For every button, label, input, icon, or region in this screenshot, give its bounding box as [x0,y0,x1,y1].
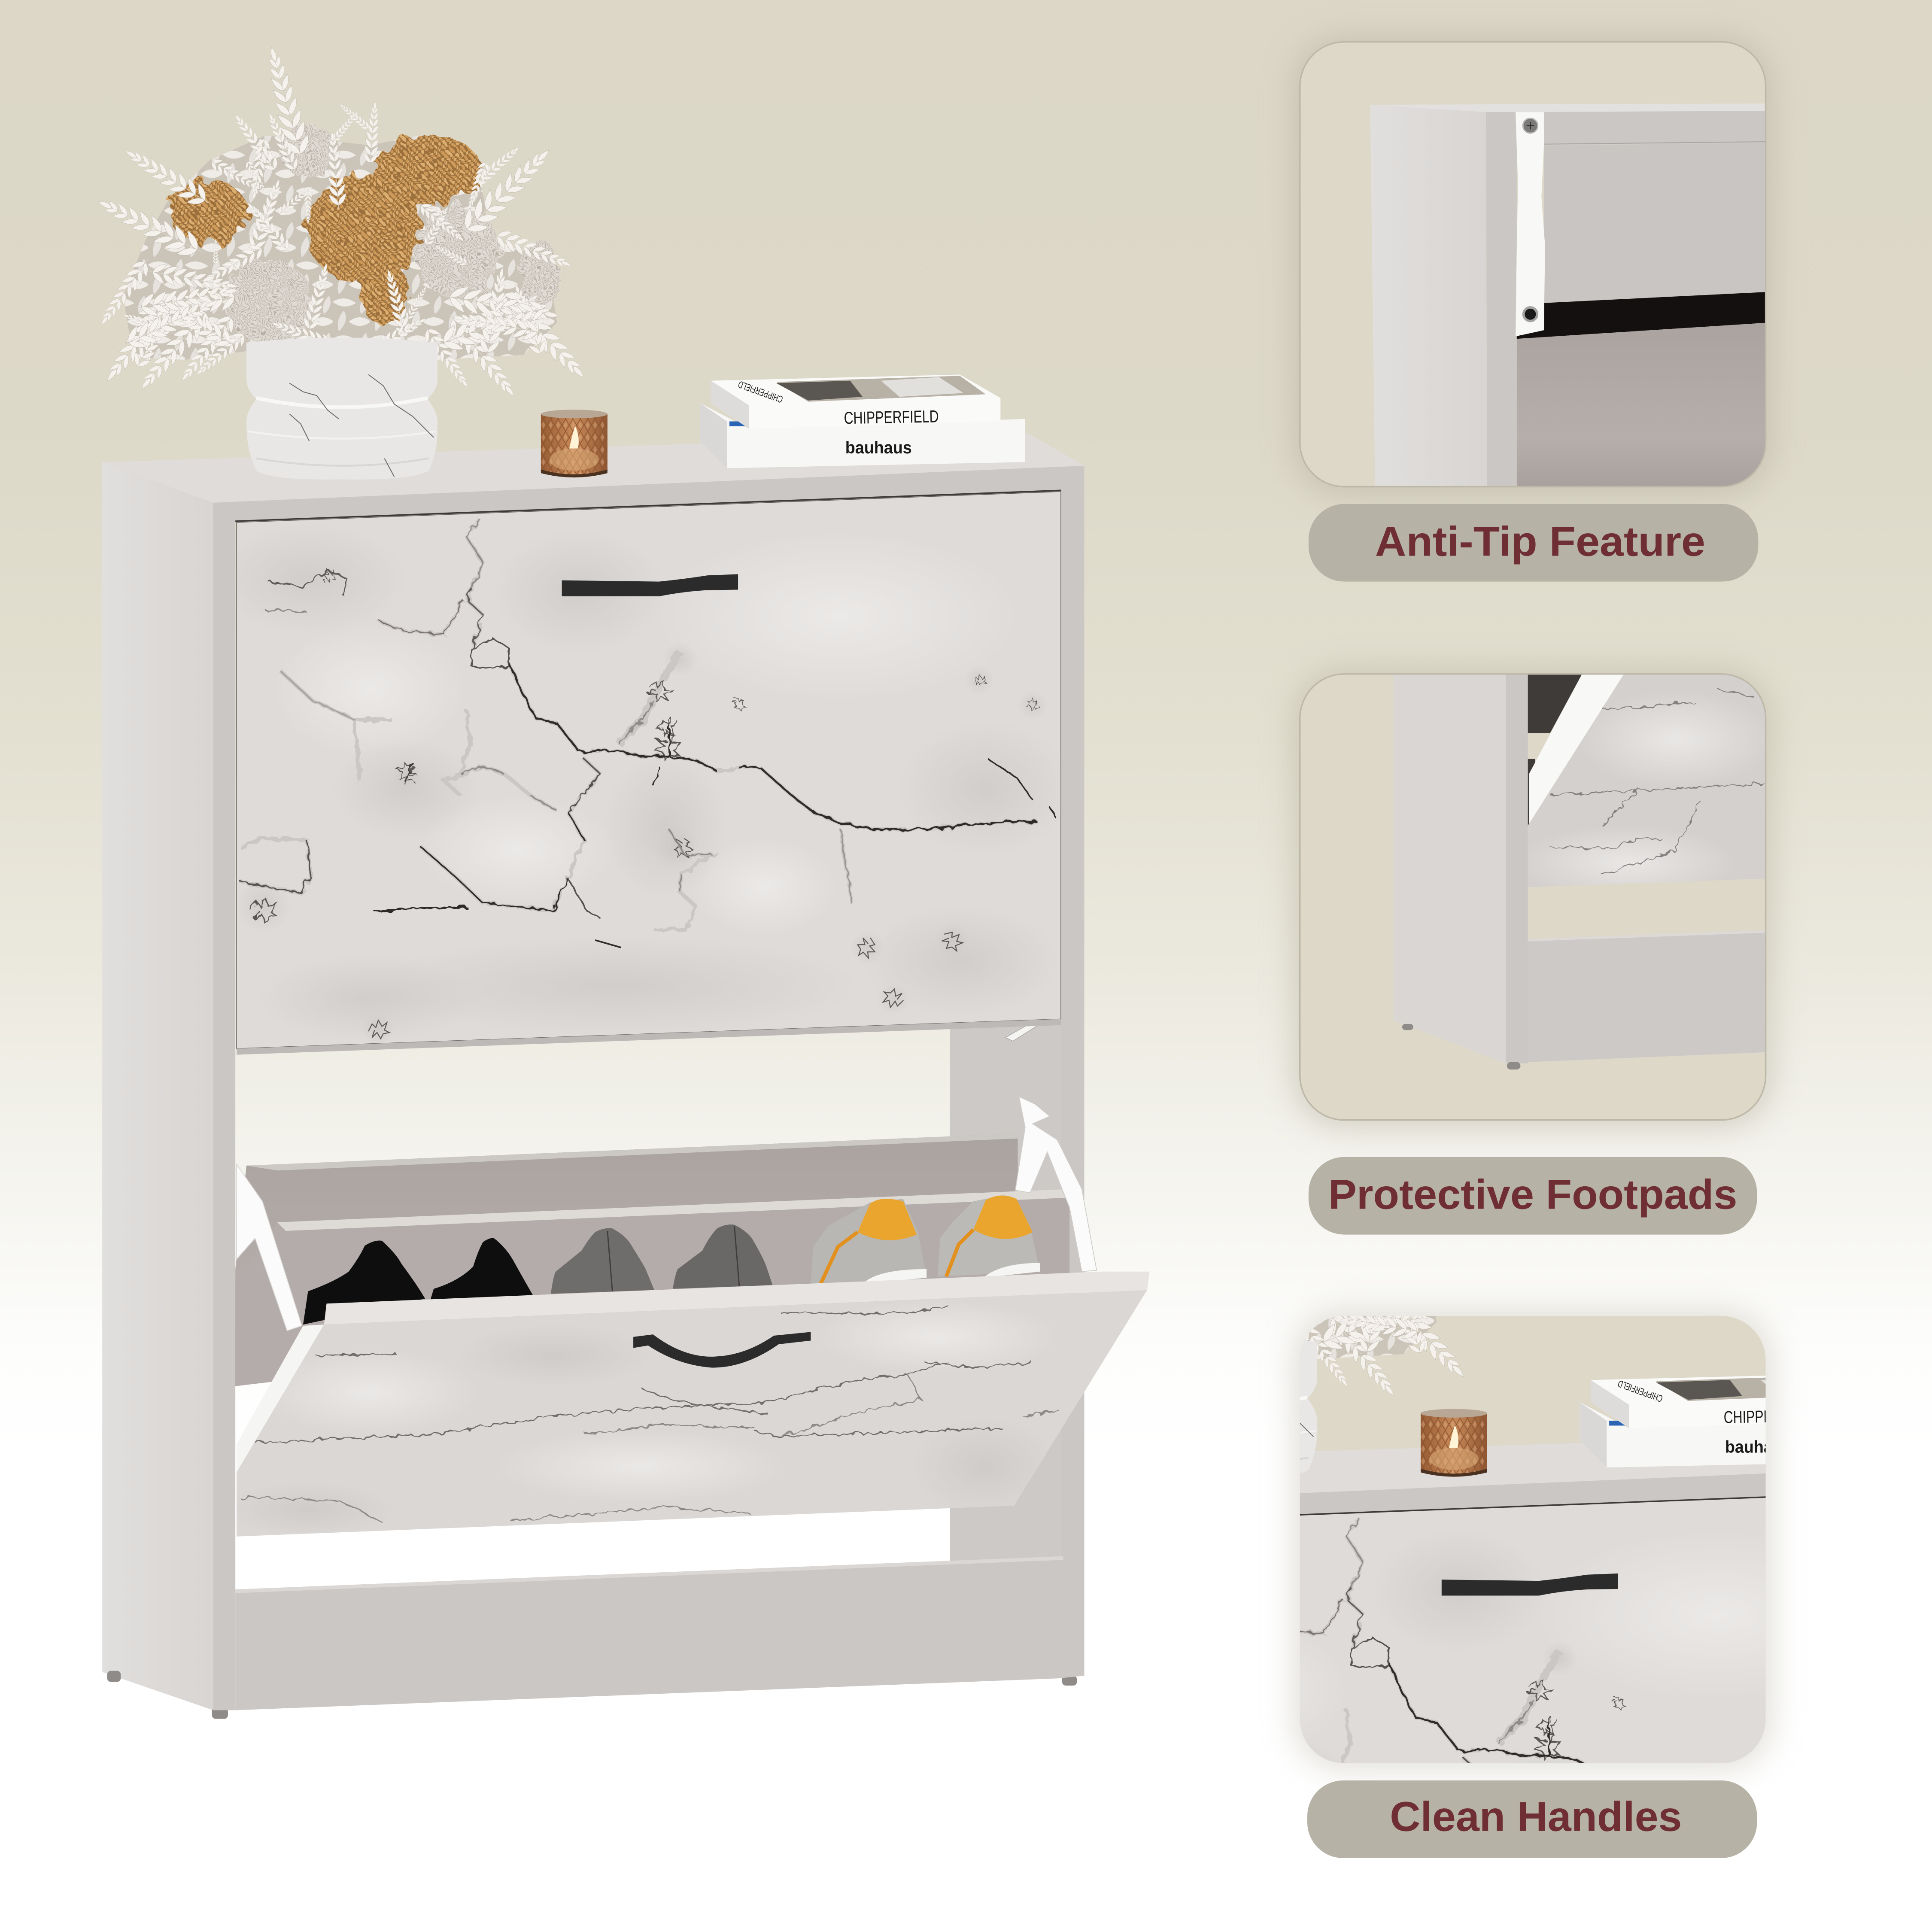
screw [1523,118,1538,133]
vein tangles [249,567,1040,924]
open tilt-out shoe compartment [235,1097,1097,1386]
main cabinet [91,43,1150,1719]
vein halo [240,519,1037,929]
lower door mottling [282,1317,1008,1517]
marble mottling and blots [210,524,1072,936]
grey plumes [224,123,559,344]
label: protective footpads: Protective Footpads [1328,1171,1738,1218]
panel: anti-tip feature [1294,37,1772,495]
lower book [700,403,1025,468]
bouquet body [123,136,557,360]
panel glow [1294,37,1772,495]
lower door veins [239,1303,1060,1522]
cabinet top surface [102,434,1084,503]
white sprigs [91,43,595,404]
label: protective footpads [1309,1157,1757,1235]
marble veins [240,519,1056,929]
interior dark [1528,674,1582,733]
clean handles image: bauhaus [1725,1437,1792,1457]
book titles on main cabinet: CHIPPERFIELD [844,407,939,428]
extra density sprigs [206,153,264,196]
cabinet feet [107,1671,1077,1719]
lower door handle [633,1332,811,1368]
decor on cabinet top [91,43,1025,480]
upper door handle [562,574,738,596]
bottom plinth [235,1556,1063,1710]
book titles on main cabinet: bauhaus [845,438,912,457]
angled marble door [1528,674,1766,887]
front top rail [213,466,1084,522]
left front stile [213,503,235,1710]
bolt [1524,307,1537,321]
panel glow [1294,1311,1772,1769]
left hinge [237,1164,302,1331]
door top edge [324,1272,1150,1324]
label: anti-tip feature [1309,504,1758,582]
cabinet top and rail [102,434,1084,522]
anti-tip image [1300,42,1766,487]
lower tilt-out door [222,1272,1150,1537]
book titles on main cabinet: CHIPPERFIELD [737,379,784,405]
flower bouquet [91,43,595,404]
clean handles image [971,1042,1932,1932]
cabinet left side panel [102,462,213,1710]
footpad [1402,1024,1520,1069]
right stile [1061,468,1084,1678]
panel: protective footpads [1294,669,1774,1127]
clean handles image: CHIPPERFIELD [1723,1406,1819,1427]
panel: clean handles [971,1042,1932,1932]
orange berry clusters [169,136,482,325]
shoes: orange and silver sneakers [811,1195,1040,1285]
upper book [711,374,1000,429]
right hinge [1015,1097,1097,1272]
label: anti-tip feature: Anti-Tip Feature [1375,518,1705,565]
inner side wall [950,1020,1061,1567]
lower door marks [259,905,1060,1045]
anti-tip strap [1516,112,1545,336]
book titles on main cabinet [737,379,939,457]
marble vase [246,337,437,480]
door marble face [237,1290,1147,1537]
white door edge [237,1324,324,1473]
upper door veins and handle [210,519,1072,936]
book stack shapes [700,374,1025,468]
panel glow [1294,669,1772,1127]
label: clean handles [1307,1780,1757,1858]
label: clean handles: Clean Handles [1390,1793,1682,1840]
door hinge arm [1005,1017,1046,1041]
back panel of compartment [235,1133,1018,1386]
upper marble door [235,490,1061,1055]
candle holder [541,410,608,477]
shoes: black pair [303,1238,534,1324]
shoes: grey pair [551,1224,772,1294]
hinge band [1529,674,1624,826]
clean handles image: CHIPPERFIELD [1616,1378,1664,1404]
footpads image [1300,674,1774,1120]
front divider [235,1189,1069,1386]
